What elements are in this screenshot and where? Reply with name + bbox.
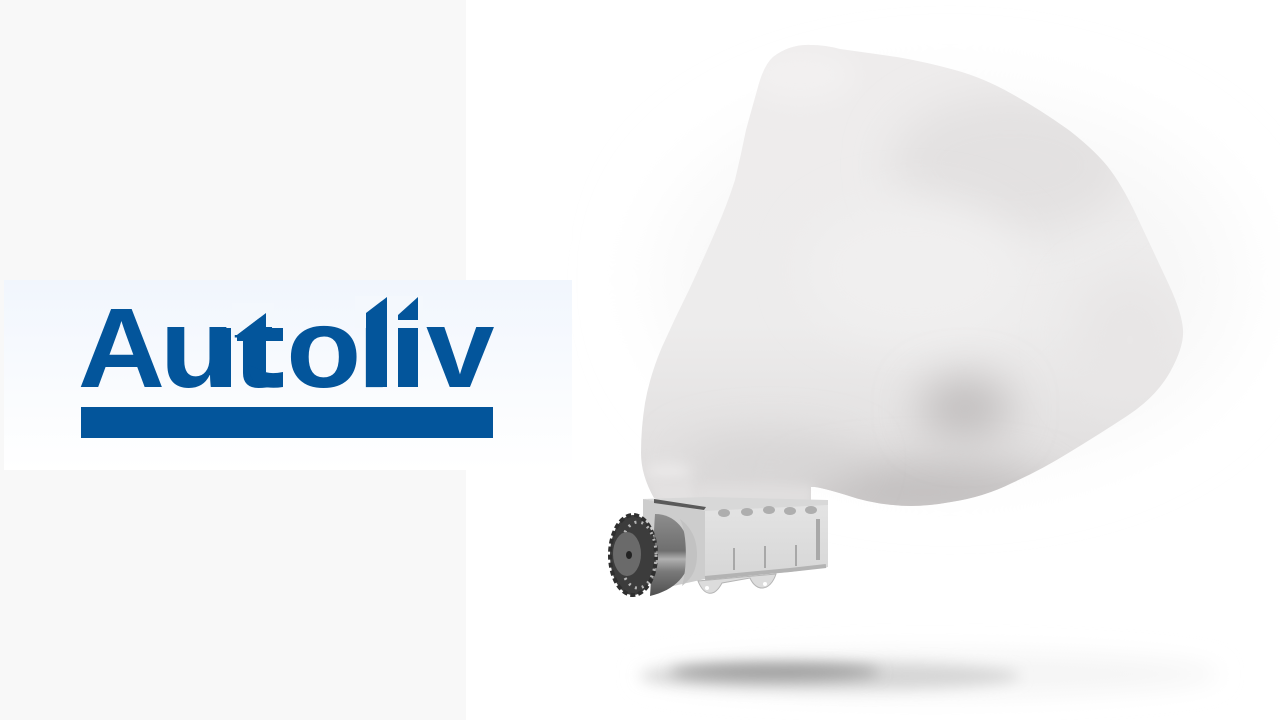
inflator barrel	[650, 514, 697, 596]
airbag cushion	[641, 45, 1183, 506]
logo wordmark: utoliv	[160, 286, 495, 412]
logo bar	[81, 407, 493, 438]
logo panel	[4, 280, 572, 470]
ambient halo behind airbag	[660, 100, 1240, 460]
logo wordmark: A	[78, 285, 165, 411]
inflator housing	[643, 497, 828, 593]
inflator gear face	[610, 515, 656, 595]
inflator module	[610, 497, 828, 596]
floor shadow	[640, 652, 1220, 696]
logo background	[4, 280, 572, 470]
